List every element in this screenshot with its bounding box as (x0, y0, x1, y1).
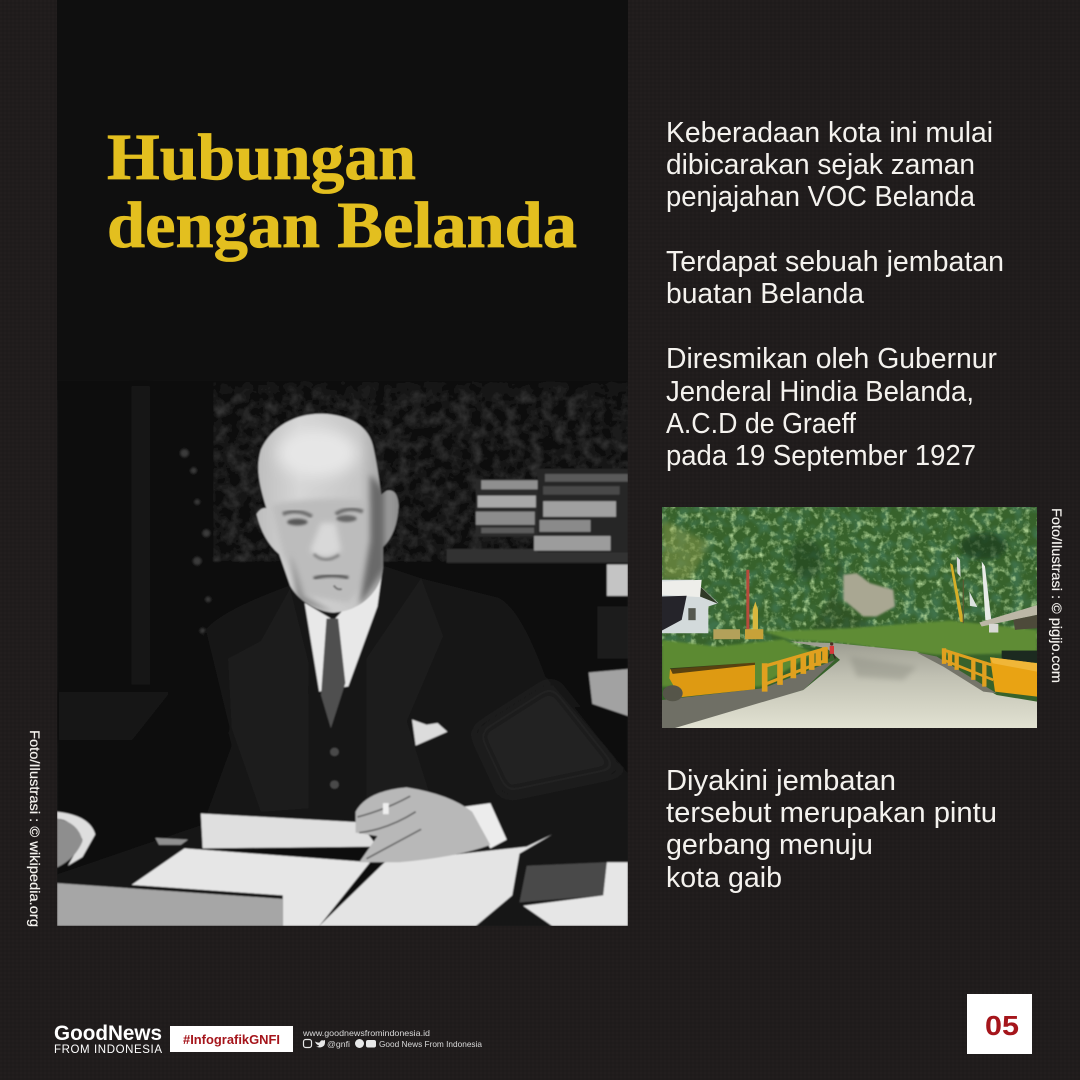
head (257, 414, 399, 613)
website and social handles: www.goodnewsfromindonesia.id (302, 1028, 430, 1038)
text block: inauguration: pada 19 September 1927 (666, 440, 976, 472)
photo: yellow bridge and forest road (662, 507, 1037, 728)
house (662, 580, 718, 633)
hashtag badge: #InfografikGNFI (183, 1032, 280, 1047)
text block: gateway belief (666, 765, 997, 894)
title: Hubungan (107, 121, 416, 194)
books and papers on desk (57, 814, 628, 926)
website and social handles: Good News From Indonesia (379, 1039, 482, 1049)
page number box (967, 994, 1032, 1054)
page number box: 05 (985, 1010, 1019, 1041)
text block: gateway belief: gerbang menuju (666, 829, 873, 861)
text block: Dutch bridge: Terdapat sebuah jembatan (666, 246, 1004, 278)
right bridge railing (943, 648, 993, 687)
flags (950, 556, 991, 623)
icon: twitter (315, 1040, 325, 1048)
road (675, 642, 1037, 728)
desk surface (58, 826, 201, 888)
icon: instagram (304, 1040, 312, 1048)
shirt collar and tie (305, 566, 383, 728)
rock face (843, 573, 895, 616)
photo: A.C.D de Graeff at his desk (57, 386, 628, 926)
person on bridge (829, 642, 835, 659)
pocket square (412, 720, 447, 746)
text block: inauguration: Jenderal Hindia Belanda, (666, 376, 974, 408)
icon: youtube (366, 1040, 376, 1048)
logo: GoodNews from Indonesia: GoodNews (54, 1022, 162, 1045)
website and social handles (302, 1028, 482, 1049)
suit (132, 566, 628, 860)
text block: inauguration: Diresmikan oleh Gubernur (666, 343, 997, 375)
text block: VOC period: penjajahan VOC Belanda (666, 181, 976, 213)
text block: VOC period: Keberadaan kota ini mulai (666, 117, 993, 149)
panel: dark title panel (57, 0, 628, 400)
logo: GoodNews from Indonesia (54, 1022, 162, 1056)
title (107, 121, 577, 262)
hashtag badge (170, 1026, 293, 1052)
text block: gateway belief: kota gaib (666, 862, 782, 894)
orange barriers (669, 657, 1037, 697)
title: dengan Belanda (107, 189, 577, 262)
icon: facebook (355, 1039, 364, 1048)
text block: Dutch bridge (666, 246, 1004, 310)
left bank with grass (662, 639, 813, 687)
website and social handles: @gnfi (327, 1039, 350, 1049)
hut on right (979, 605, 1037, 663)
text block: inauguration (666, 343, 997, 472)
credit: wikipedia: Foto/Ilustrasi : © wikipedia.org (27, 730, 43, 927)
pole and monument (713, 570, 763, 639)
credit: pigijo: Foto/Ilustrasi : © pigijo.com (1049, 508, 1065, 683)
text block: Dutch bridge: buatan Belanda (666, 278, 865, 310)
text block: VOC period: dibicarakan sejak zaman (666, 149, 975, 181)
hand with ring and cuff (57, 787, 507, 868)
text block: gateway belief: tersebut merupakan pintu (666, 797, 997, 829)
books on shelf (447, 469, 628, 716)
text block: inauguration: A.C.D de Graeff (666, 408, 857, 440)
text block: gateway belief: Diyakini jembatan (666, 765, 896, 797)
left bridge railing (763, 647, 827, 692)
logo: GoodNews from Indonesia: FROM INDONESIA (54, 1044, 162, 1056)
text block: VOC period (666, 117, 993, 213)
